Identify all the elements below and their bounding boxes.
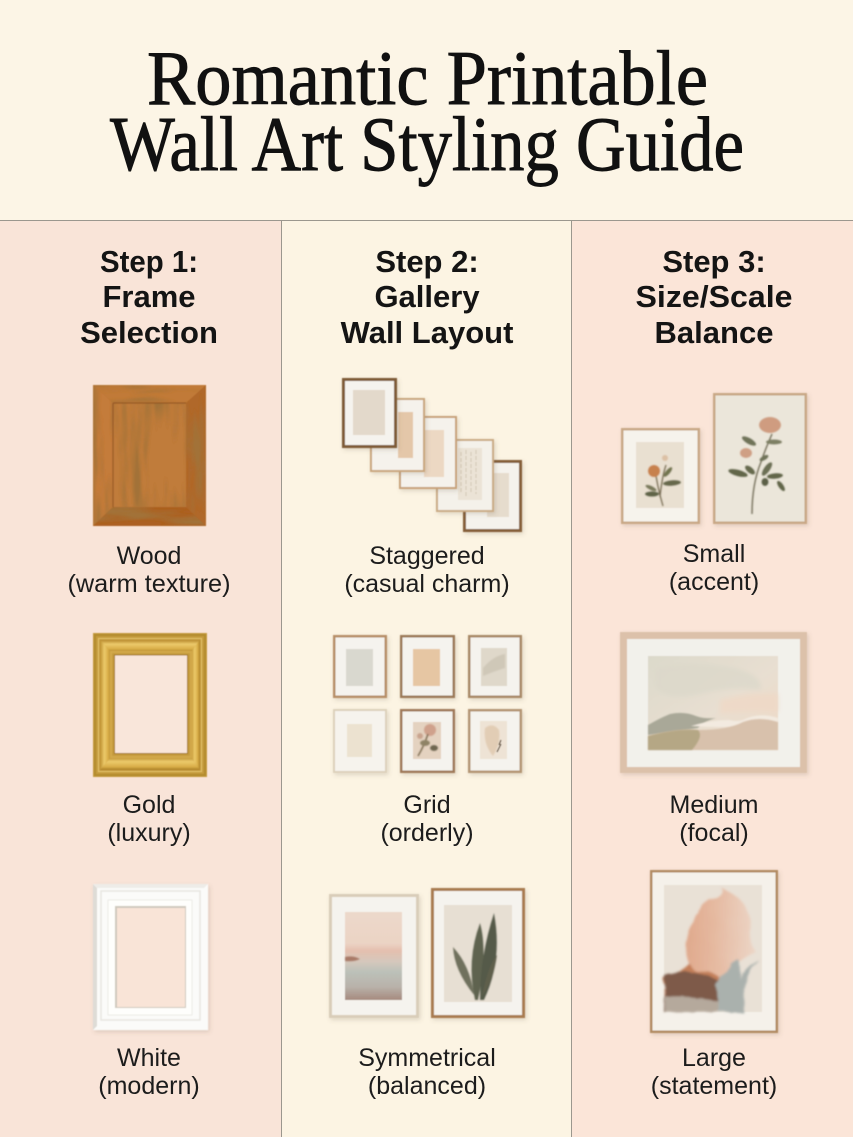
label: staggered: Staggered (369, 542, 485, 570)
heading: step 3: Step 3: (662, 244, 766, 279)
label: white (98, 1044, 200, 1100)
label: wood: (warm texture) (68, 570, 230, 598)
illustration: grid frames (333, 635, 522, 773)
label: gold (107, 791, 191, 847)
heading: step 1 (80, 244, 218, 350)
label: grid: (orderly) (380, 819, 474, 847)
title: Wall Art Styling Guide (110, 101, 744, 187)
icon: wood frame (93, 385, 206, 526)
label: small: (accent) (669, 568, 759, 596)
heading: step 2: Wall Layout (341, 315, 513, 350)
title: Romantic Printable (147, 35, 708, 121)
label: large (651, 1044, 777, 1100)
label: symmetrical: Symmetrical (358, 1044, 496, 1072)
label: large: (statement) (651, 1072, 777, 1100)
illustration: symmetrical frames (329, 888, 525, 1018)
frame: small botanical (621, 428, 700, 524)
frame: landscape print (329, 894, 419, 1018)
illustration: medium landscape frame (620, 632, 807, 773)
illustration: small and tall botanical frames (621, 393, 807, 524)
icon: white frame (93, 884, 208, 1030)
label: medium: Medium (670, 791, 758, 819)
panel: step 2 gallery wall layout (281, 220, 572, 1137)
label: wood: Wood (117, 542, 181, 570)
panel: step 3 size and scale balance (572, 220, 853, 1137)
label: wood (68, 542, 230, 598)
label: staggered: (casual charm) (344, 570, 510, 598)
frame: leaf print (431, 888, 525, 1018)
label: small (669, 540, 759, 596)
label: grid: Grid (403, 791, 451, 819)
heading: step 3 (636, 244, 792, 350)
label: gold: Gold (123, 791, 175, 819)
heading: step 3: Balance (655, 315, 773, 350)
label: large: Large (682, 1044, 746, 1072)
label: symmetrical (358, 1044, 496, 1100)
label: grid (380, 791, 474, 847)
heading: step 2: Gallery (374, 279, 480, 314)
label: gold: (luxury) (107, 819, 191, 847)
label: small: Small (683, 540, 745, 568)
heading: step 1: Selection (80, 315, 218, 350)
heading: step 1: Frame (102, 279, 196, 314)
label: medium: (focal) (679, 819, 749, 847)
label: white: (modern) (98, 1072, 200, 1100)
label: white: White (117, 1044, 181, 1072)
label: symmetrical: (balanced) (368, 1072, 486, 1100)
illustration: staggered frames (342, 378, 522, 532)
heading: step 2 (341, 244, 513, 350)
heading: step 2: Step 2: (375, 244, 479, 279)
label: staggered (344, 542, 510, 598)
heading: step 1: Step 1: (100, 244, 198, 279)
heading: step 3: Size/Scale (636, 279, 792, 314)
frame: tall botanical (713, 393, 807, 524)
icon: gold frame (93, 633, 207, 777)
label: medium (670, 791, 758, 847)
title (110, 35, 744, 187)
page header band (0, 0, 853, 220)
panel: step 1 frame selection (0, 220, 281, 1137)
illustration: large abstract frame (650, 870, 778, 1033)
